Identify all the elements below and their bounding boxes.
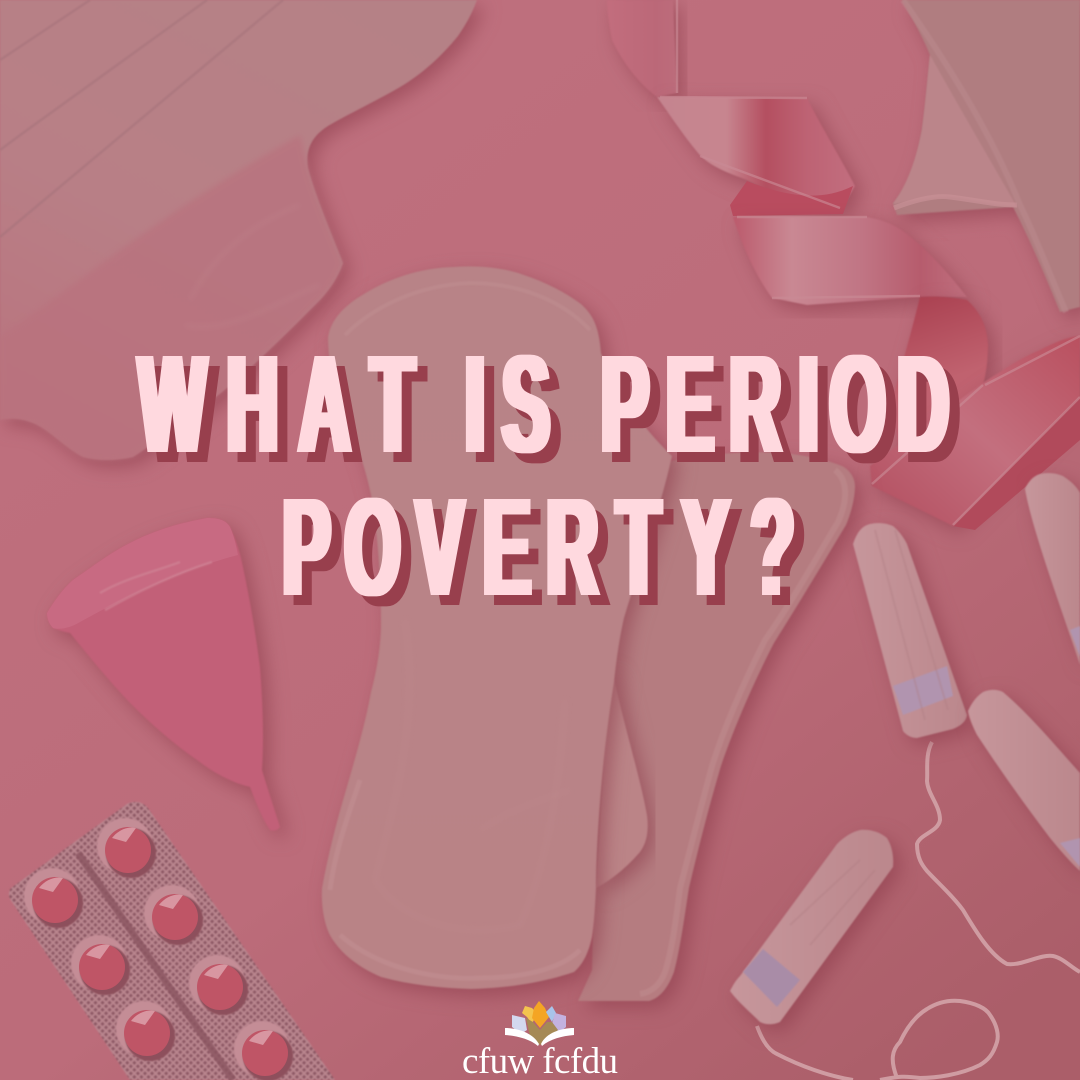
ribbon: third fold: [733, 217, 967, 305]
tampon lower: [730, 830, 893, 1024]
ribbon: wide lower band: [870, 336, 1080, 526]
logo icon: lotus petals: [512, 1001, 566, 1045]
photo: sanitary pad rear: [578, 452, 855, 1001]
photo: sanitary pad top right: [893, 0, 1080, 312]
pill 5: [189, 955, 248, 1015]
photo: pink satin ribbon: [607, 0, 1080, 530]
tampon string one: [917, 742, 1080, 972]
photo: tampons and strings: [730, 473, 1080, 1080]
pill 1: [97, 818, 156, 878]
logo icon: open book: [505, 1028, 574, 1046]
title: second line: POVERTY?: [283, 470, 794, 625]
pill 3: [144, 885, 203, 945]
photo: blister pack of pills: [9, 802, 335, 1080]
tampon right top: [1025, 473, 1080, 665]
tampon upper: [853, 523, 967, 738]
title: first line: WHAT IS PERIOD: [139, 327, 949, 482]
photo: sanitary pad front: [322, 266, 672, 989]
photo: sanitary pad middle: [596, 660, 648, 888]
ribbon: dark underside: [953, 397, 1080, 530]
photo: menstrual cup: [47, 518, 280, 831]
ribbon: hidden fold: [730, 181, 853, 216]
pill 6: [116, 1001, 175, 1061]
ribbon: fourth fold: [892, 297, 988, 460]
logo: cfuw fcfdu: [462, 1001, 618, 1080]
tampon string two: [757, 1001, 998, 1080]
pill 2: [24, 868, 83, 928]
ribbon: hanging top strip: [607, 0, 677, 97]
pill 4: [71, 935, 130, 995]
title: [139, 327, 949, 625]
photo: wing pad top left: [0, 0, 477, 460]
tampon right middle: [968, 690, 1080, 871]
pill 7: [234, 1021, 293, 1080]
ribbon: second fold: [657, 97, 855, 212]
